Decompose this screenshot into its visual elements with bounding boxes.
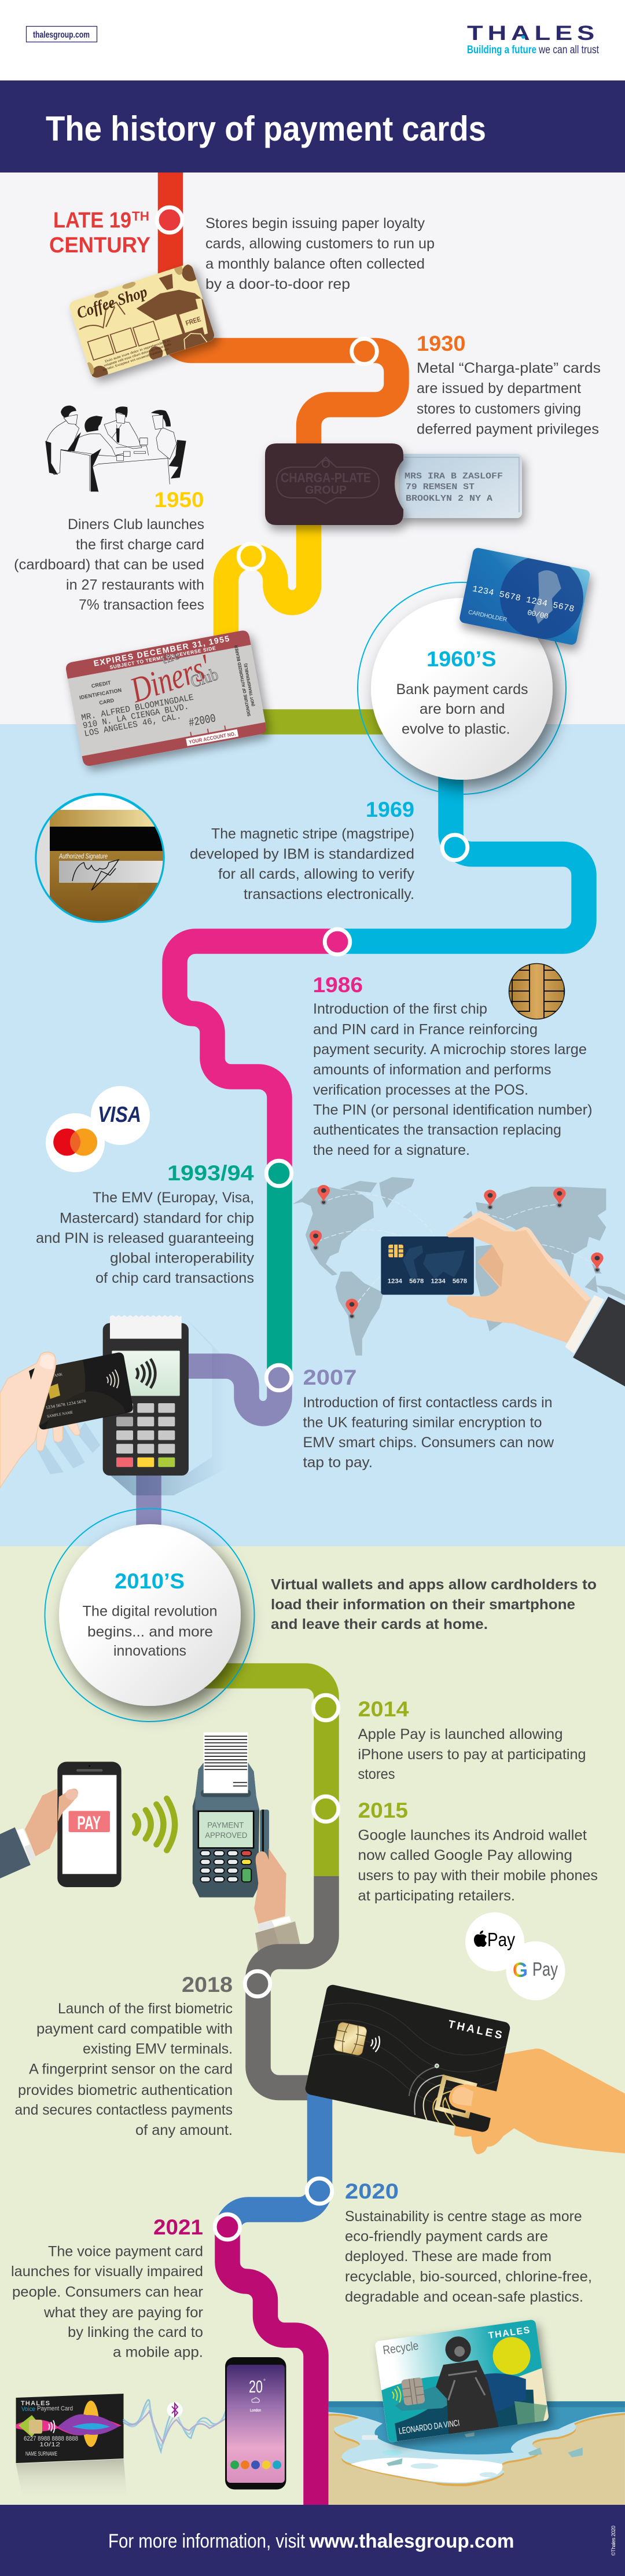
text: 2015 bbox=[358, 1827, 598, 1904]
text: 1986: the need for a signature. bbox=[313, 1142, 470, 1158]
receipt bbox=[110, 1315, 182, 1339]
diver bbox=[436, 2336, 499, 2434]
illustration: voice payment card: Payment Card bbox=[37, 2405, 73, 2412]
illustration: phone with pay button and hand bbox=[0, 1762, 175, 1887]
text: 1969 bbox=[190, 825, 415, 902]
terminal keys bbox=[116, 1403, 175, 1467]
phone with weather screen: London bbox=[250, 2409, 261, 2413]
card: coffee shop loyalty card bbox=[64, 256, 222, 385]
card: diners club: Club bbox=[188, 665, 220, 692]
card: diners club: CARD bbox=[99, 698, 115, 706]
text: 2021: by linking the card to bbox=[68, 2324, 203, 2340]
text: 1950: 7% transaction fees bbox=[79, 597, 204, 613]
track: pink bbox=[175, 941, 337, 1173]
text: 2018: of any amount. bbox=[135, 2122, 233, 2138]
card: coffee shop loyalty card: FREE bbox=[185, 315, 202, 328]
text: 2021 bbox=[11, 2244, 203, 2361]
terminal screen: APPROVED bbox=[205, 1831, 247, 1840]
card: coffee shop loyalty card: Coffee Shop bbox=[75, 283, 149, 322]
black contactless card bbox=[29, 1353, 133, 1429]
heading: 1930: 1930 bbox=[417, 332, 465, 355]
hand holding card bbox=[446, 1212, 591, 1343]
text: late 19th century: cards, allowing customers to run up bbox=[205, 236, 435, 252]
white disc bbox=[371, 598, 553, 780]
text: 2021: The voice payment card bbox=[48, 2244, 203, 2260]
text: virtual wallets callout: Virtual wallets and apps allow cardholders to bbox=[271, 1577, 597, 1593]
illustration: voice payment card: Voice bbox=[21, 2406, 35, 2413]
text: virtual wallets callout bbox=[271, 1577, 597, 1632]
text: 1930: stores to customers giving bbox=[417, 401, 581, 417]
text: 1960's: Bank payment cards bbox=[396, 681, 528, 698]
text: 2018: provides biometric authentication bbox=[18, 2082, 233, 2098]
terminal screen bbox=[198, 1811, 253, 1848]
track: red bbox=[158, 173, 183, 313]
text: 1969: for all cards, allowing to verify bbox=[218, 866, 415, 882]
world map bbox=[293, 1177, 625, 1356]
footer: www.thalesgroup.com bbox=[309, 2530, 514, 2552]
icon: magnetic stripe circle bbox=[35, 794, 166, 923]
card: diners club: MR. ALFRED BLOOMINGDALE bbox=[80, 693, 194, 723]
text: 2007 bbox=[303, 1395, 554, 1470]
text: 2010's: begins... and more bbox=[87, 1624, 213, 1640]
text: 1986: verification processes at the POS. bbox=[313, 1082, 528, 1098]
icon: chip bbox=[509, 963, 565, 1019]
illustration: world map, hand and chip card bbox=[293, 1177, 625, 1386]
text: 1969: The magnetic stripe (magstripe) bbox=[211, 825, 414, 842]
card: diners club: YOUR ACCOUNT NO. bbox=[189, 731, 236, 745]
card: diners club bbox=[65, 629, 267, 767]
text: 2015: Google launches its Android wallet bbox=[358, 1827, 587, 1843]
white disc bbox=[59, 1524, 241, 1706]
text: 2018: payment card compatible with bbox=[36, 2021, 233, 2037]
illustration: hand behind biometric card bbox=[454, 2049, 625, 2155]
text: 2020: degradable and ocean-safe plastics. bbox=[345, 2289, 583, 2305]
fingerprint arcs bbox=[409, 2067, 456, 2126]
title banner: The history of payment cards bbox=[46, 109, 486, 148]
terminal keys bbox=[200, 1851, 251, 1882]
text: 1993/94: The EMV (Europay, Visa, bbox=[93, 1190, 254, 1206]
text: 2018: A fingerprint sensor on the card bbox=[29, 2061, 233, 2077]
receipt bbox=[204, 1733, 248, 1793]
text: 2015: at participating retailers. bbox=[358, 1888, 515, 1904]
page background: blue section bbox=[0, 724, 625, 1546]
illustration: charga-plate card: MRS IRA B ZASLOFF bbox=[405, 471, 503, 482]
text: 2014: iPhone users to pay at participating bbox=[358, 1746, 586, 1763]
illustration: contactless approved terminal with hand bbox=[193, 1733, 302, 1968]
terminal body bbox=[103, 1323, 189, 1476]
track: yellow bbox=[226, 463, 309, 695]
heading: 1993/94: 1993/94 bbox=[167, 1161, 254, 1185]
illustration: voice payment card: 6227 8988 8888 8888 bbox=[24, 2435, 78, 2442]
phone with weather screen: 20 bbox=[249, 2377, 263, 2397]
text: 2007: tap to pay. bbox=[303, 1454, 373, 1470]
card: coffee shop loyalty card: pariatur. Excepteur sint occaecat cupidatat non bbox=[102, 347, 170, 372]
track: cyan bbox=[337, 753, 584, 941]
card: plastic bank card: CARDHOLDER bbox=[468, 609, 508, 623]
text: 1993/94: Mastercard) standard for chip bbox=[60, 1210, 254, 1226]
card: coffee shop loyalty card: Duis aute irure dolor in reprehenderit in bbox=[105, 339, 171, 364]
card: diners club: (NOT TRANSFERABLE) bbox=[244, 663, 256, 706]
heading: 1986: 1986 bbox=[312, 973, 363, 997]
card: plastic bank card: 1234 5678 1234 5678 bbox=[472, 584, 575, 614]
card: diners club: CREDIT bbox=[91, 680, 112, 689]
text: 1930 bbox=[417, 360, 601, 438]
panel: 2010s bubble bbox=[45, 1509, 255, 1722]
illustration: voice payment card: NAME SURNAME bbox=[25, 2451, 57, 2457]
card: diners club: Diners' bbox=[125, 647, 216, 710]
card: diners club: LOS ANGELES 46, CAL. bbox=[83, 711, 182, 739]
track: green bbox=[267, 1173, 292, 1378]
text: 1969: developed by IBM is standardized bbox=[190, 846, 414, 863]
icon: google pay badge: Pay bbox=[532, 1958, 558, 1980]
icon: apple pay badge: Pay bbox=[487, 1929, 515, 1950]
text: 2010's bbox=[82, 1603, 218, 1659]
card: diners club: IDENTIFICATION bbox=[79, 687, 122, 700]
text: 1993/94: and PIN is released guaranteeing bbox=[36, 1230, 254, 1246]
Thales logo: we can all trust bbox=[538, 44, 600, 56]
illustration: 1950s diners sketch bbox=[45, 406, 186, 492]
text: 1950: (cardboard) that can be used bbox=[14, 557, 204, 573]
text: 2007: EMV smart chips. Consumers can now bbox=[303, 1434, 554, 1451]
heading: late 19th century bbox=[49, 208, 150, 258]
text: late 19th century bbox=[205, 215, 435, 292]
card: biometric card bbox=[304, 1984, 511, 2134]
heading: 2020: 2020 bbox=[345, 2179, 399, 2203]
text: 1960's: evolve to plastic. bbox=[402, 721, 510, 737]
card: diners club: EXPIRES DECEMBER 31, 1955 bbox=[93, 634, 230, 668]
track: orange bbox=[170, 313, 396, 463]
text: 1986: Introduction of the first chip bbox=[313, 1001, 487, 1017]
phone bbox=[57, 1762, 122, 1887]
heading: 2015: 2015 bbox=[358, 1799, 408, 1822]
text: 1986: authenticates the transaction replacing bbox=[313, 1122, 561, 1138]
text: 2020: Sustainability is centre stage as more bbox=[345, 2208, 582, 2225]
track: blue bbox=[227, 2084, 320, 2230]
text: 2020: eco-friendly payment cards are bbox=[345, 2229, 548, 2245]
text: 2021: what they are paying for bbox=[43, 2305, 203, 2321]
illustration: charga-plate card bbox=[265, 443, 522, 525]
text: 2018: Launch of the first biometric bbox=[58, 2001, 233, 2017]
text: virtual wallets callout: load their information on their smartphone bbox=[271, 1597, 575, 1613]
text: late 19th century: Stores begin issuing paper loyalty bbox=[205, 215, 425, 232]
card: recycled card with diver: LEONARDO DA VINCI bbox=[398, 2418, 460, 2436]
text: 1986: The PIN (or personal identification number) bbox=[313, 1102, 593, 1118]
icon: mastercard badge bbox=[46, 1113, 105, 1172]
track: magenta bbox=[227, 2227, 316, 2505]
text: 2020: deployed. These are made from bbox=[345, 2248, 552, 2265]
text: 2014: stores bbox=[358, 1766, 395, 1782]
heading: late 19th century: CENTURY bbox=[49, 233, 150, 258]
text: 1993/94 bbox=[36, 1190, 255, 1286]
card: plastic bank card: 00/00 bbox=[527, 608, 549, 621]
black contactless card: ANK bbox=[54, 1373, 63, 1378]
illustration: charga-plate card: 79 REMSEN ST bbox=[406, 482, 475, 492]
text: 1930: deferred payment privileges bbox=[417, 421, 599, 438]
heading: 2021: 2021 bbox=[153, 2215, 203, 2239]
illustration: beach scene bbox=[328, 2401, 625, 2505]
illustration: voice payment card: 10/12 bbox=[39, 2442, 61, 2448]
track: purple bbox=[149, 1366, 280, 1534]
card: biometric card: THALES bbox=[447, 2018, 503, 2042]
outer ring bbox=[45, 1509, 255, 1722]
phone with weather screen: ° bbox=[263, 2379, 266, 2385]
sleeve and cuff bbox=[565, 1295, 604, 1353]
text: 2014 bbox=[358, 1726, 586, 1782]
heading: 1950: 1950 bbox=[154, 488, 204, 512]
terminal screen: PAYMENT bbox=[207, 1821, 244, 1830]
text: 1930: are issued by department bbox=[417, 380, 581, 397]
navy chip card: 1234 bbox=[388, 1278, 403, 1285]
page background: green section bbox=[0, 1546, 625, 2505]
icon: google pay badge bbox=[506, 1942, 565, 2001]
card: coffee shop loyalty card: voluptate velit esse cillum dolore eu fugiat nulla bbox=[104, 343, 172, 368]
panel: 1960s bubble bbox=[358, 541, 592, 794]
icon: apple pay badge bbox=[465, 1913, 524, 1972]
card: recycled card with diver bbox=[374, 2320, 549, 2442]
navy chip card: 5678 bbox=[409, 1278, 424, 1285]
phone with weather screen bbox=[225, 2357, 286, 2489]
card: diners club: the bbox=[160, 647, 181, 667]
text: 1950 bbox=[14, 516, 204, 613]
terminal screen with contactless waves bbox=[112, 1351, 180, 1396]
text: 1986: amounts of information and performs bbox=[313, 1062, 551, 1078]
text: 2007: Introduction of first contactless cards in bbox=[303, 1395, 552, 1411]
text: 1930: Metal “Charga-plate” cards bbox=[417, 360, 601, 376]
illustration: voice payment card: THALES bbox=[21, 2400, 50, 2407]
text: 1969: transactions electronically. bbox=[244, 886, 414, 902]
illustration: contactless terminal and hand bbox=[0, 1315, 227, 1495]
fingers behind card bbox=[36, 1421, 80, 1451]
hand and thumb bbox=[0, 1352, 56, 1488]
text: 2018 bbox=[15, 2001, 233, 2138]
card: plastic bank card bbox=[458, 541, 592, 647]
text: 2020: recyclable, bio-sourced, chlorine-free, bbox=[345, 2269, 592, 2285]
card: diners club: 910 N. LA CIENGA BLVD. bbox=[82, 702, 190, 731]
page background: header bbox=[0, 0, 625, 80]
text: 2021: launches for visually impaired bbox=[11, 2263, 203, 2280]
text: 2010's: innovations bbox=[113, 1643, 186, 1659]
track: grey bbox=[258, 1876, 330, 2087]
Thales logo: THALES bbox=[467, 22, 599, 45]
Thales logo: Building a future bbox=[467, 44, 536, 56]
hand over terminal bbox=[254, 1848, 286, 1924]
thumb on sensor bbox=[437, 2077, 535, 2134]
text: 1986: payment security. A microchip stores large bbox=[313, 1041, 587, 1058]
timeline milestones rings bbox=[157, 207, 468, 2240]
text: 1960's: are born and bbox=[420, 701, 505, 717]
text: 1986: and PIN card in France reinforcing bbox=[313, 1021, 538, 1037]
heading: late 19th century: LATE 19 bbox=[53, 208, 131, 233]
text: 2018: existing EMV terminals. bbox=[83, 2041, 233, 2057]
illustration: charga-plate card: BROOKLYN 2 NY A bbox=[406, 494, 492, 504]
text: virtual wallets callout: and leave their cards at home. bbox=[271, 1616, 488, 1632]
black contactless card: SAMPLE NAME bbox=[47, 1411, 73, 1419]
sound wave bbox=[123, 2400, 226, 2452]
track: olive to 2015 bbox=[197, 1676, 326, 1876]
heading: 2014: 2014 bbox=[358, 1697, 409, 1721]
icon: bluetooth badge bbox=[167, 2402, 183, 2417]
Thales logo bbox=[467, 22, 600, 56]
sleeve bbox=[0, 1828, 35, 1878]
black contactless card: 1234 5678 1234 5678 bbox=[45, 1398, 87, 1410]
heading: 1969: 1969 bbox=[366, 798, 414, 821]
text: 2021: people. Consumers can hear bbox=[12, 2284, 203, 2300]
text: 1993/94: of chip card transactions bbox=[95, 1270, 254, 1286]
website tag bbox=[27, 27, 97, 42]
text: 1986 bbox=[313, 1001, 593, 1158]
text: late 19th century: by a door-to-door rep bbox=[205, 276, 350, 292]
text: 2020 bbox=[345, 2208, 592, 2305]
website tag: thalesgroup.com bbox=[33, 30, 90, 40]
illustration: charga-plate card: CHARGA-PLATE bbox=[281, 470, 371, 485]
text: late 19th century: a monthly balance often collected bbox=[205, 256, 425, 272]
card: diners club: SIGNATURE OF AUTHORIZED BEARER bbox=[233, 644, 252, 717]
card: recycled card with diver: THALES bbox=[488, 2325, 531, 2341]
terminal body bbox=[193, 1763, 269, 1898]
text: 2021: a mobile app. bbox=[113, 2344, 203, 2361]
navy chip card bbox=[381, 1236, 474, 1295]
icon: magnetic stripe circle: Authorized Signature bbox=[58, 852, 108, 860]
text: 1950: the first charge card bbox=[76, 537, 204, 553]
card: recycled card with diver: Recycle bbox=[382, 2339, 420, 2357]
text: 2015: now called Google Pay allowing bbox=[358, 1847, 572, 1863]
back of hand bbox=[25, 1789, 62, 1856]
heading: 2010's: 2010’S bbox=[115, 1569, 185, 1593]
text: 2010's: The digital revolution bbox=[82, 1603, 218, 1620]
text: 1950: in 27 restaurants with bbox=[66, 577, 204, 593]
footer: ©Thales 2020 bbox=[611, 2526, 616, 2556]
text: 1960's bbox=[396, 681, 528, 737]
text: 1993/94: global interoperability bbox=[110, 1250, 255, 1267]
icon: google pay badge: G bbox=[513, 1959, 528, 1981]
text: 2014: Apple Pay is launched allowing bbox=[358, 1726, 562, 1742]
text: 2018: and secures contactless payments bbox=[15, 2102, 233, 2118]
contactless waves bbox=[135, 1799, 175, 1851]
text: 1950: Diners Club launches bbox=[68, 516, 204, 533]
text: 2015: users to pay with their mobile phones bbox=[358, 1867, 598, 1884]
timeline tracks bbox=[149, 173, 584, 2505]
illustration: voice payment card bbox=[16, 2394, 127, 2501]
sleeve and hand holding terminal bbox=[255, 1916, 302, 1968]
heading: late 19th century: TH bbox=[132, 209, 149, 223]
icon: visa badge: VISA bbox=[98, 1103, 141, 1127]
navy chip card: 5678 bbox=[453, 1278, 467, 1285]
track: olive to 1960s bbox=[226, 695, 405, 722]
map pins bbox=[310, 1185, 604, 1319]
footer: For more information, visit bbox=[108, 2530, 305, 2552]
pay button bbox=[69, 1811, 110, 1834]
heading: 2007: 2007 bbox=[303, 1366, 356, 1389]
page background: grey section bbox=[0, 173, 625, 724]
card: diners club: #2000 bbox=[188, 712, 217, 730]
long shadows bbox=[36, 1318, 227, 1495]
illustration: charga-plate card: GROUP bbox=[305, 484, 347, 497]
text: 2007: the UK featuring similar encryption to bbox=[303, 1415, 542, 1431]
navy chip card: 1234 bbox=[431, 1278, 446, 1285]
heading: 1960's: 1960’S bbox=[427, 647, 497, 671]
footer bbox=[0, 2505, 625, 2576]
heading: 2018: 2018 bbox=[182, 1973, 233, 1997]
outer ring bbox=[358, 582, 566, 794]
pay button: PAY bbox=[77, 1812, 101, 1834]
card: diners club: SUBJECT TO TERMS ON REVERSE SIDE bbox=[109, 645, 216, 670]
thumb bbox=[58, 1789, 78, 1822]
icon: visa badge bbox=[91, 1086, 150, 1145]
title banner bbox=[0, 80, 625, 173]
